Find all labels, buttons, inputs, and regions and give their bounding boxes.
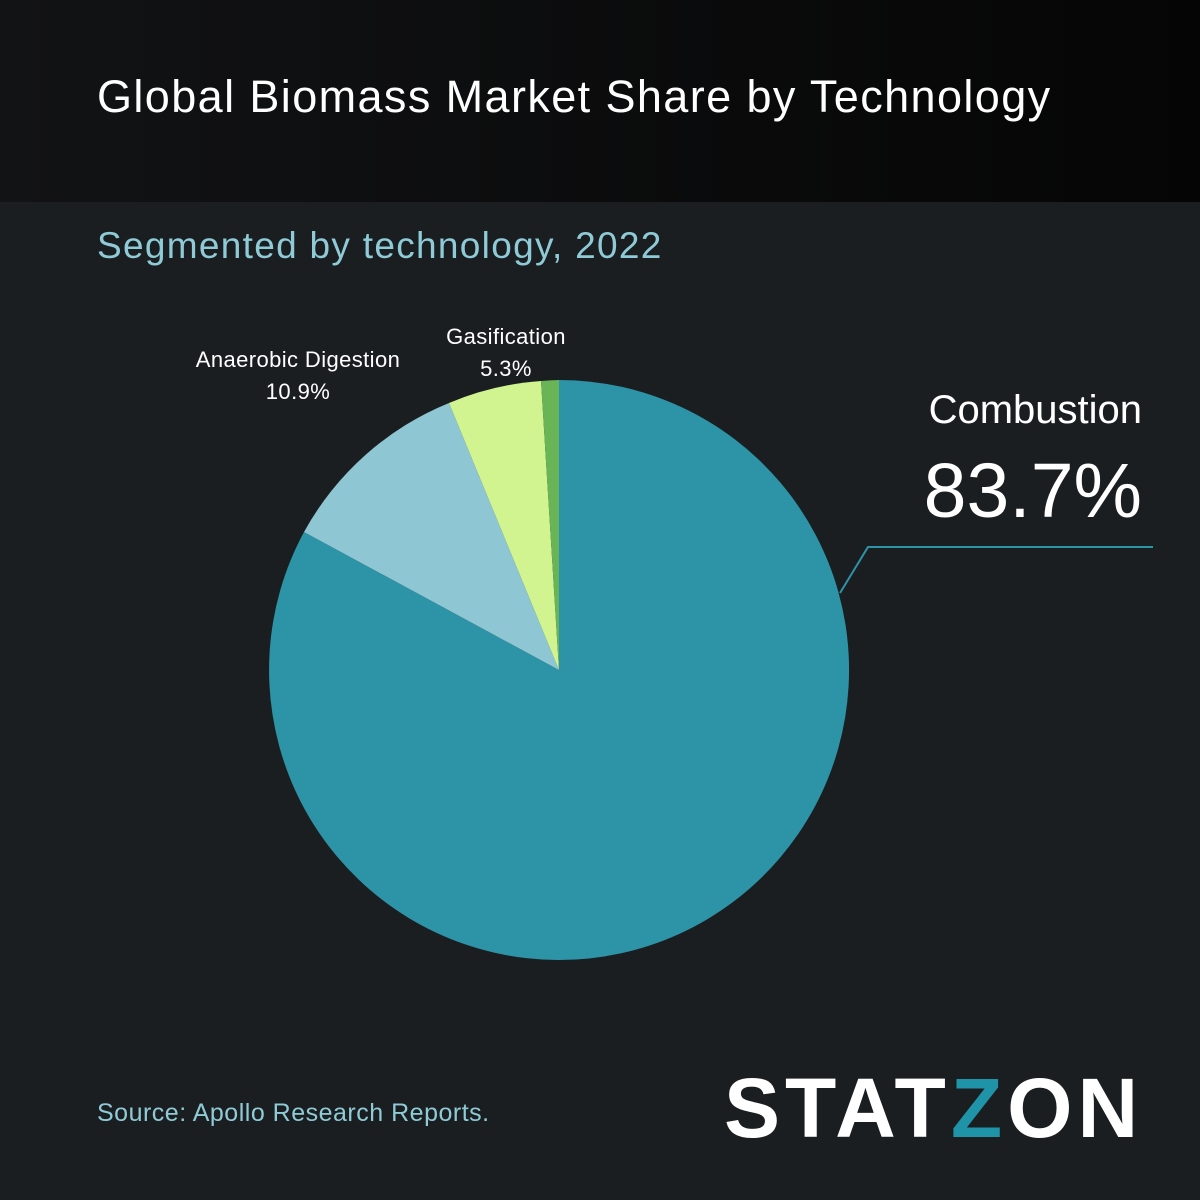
label: anaerobic digestion: Anaerobic Digestion — [196, 347, 400, 372]
label: anaerobic digestion: 10.9% — [266, 379, 330, 404]
label: combustion: Combustion — [929, 388, 1142, 432]
subtitle: Segmented by technology, 2022 — [97, 225, 663, 266]
source: Source: Apollo Research Reports. — [97, 1099, 490, 1127]
label: gasification: Gasification — [446, 324, 566, 349]
slice: combustion — [269, 380, 849, 960]
slice: anaerobic digestion — [304, 403, 559, 670]
logo: STATZON — [724, 1061, 1143, 1155]
label: gasification: 5.3% — [480, 356, 532, 381]
label: combustion: 83.7% — [924, 448, 1142, 534]
leader line: combustion — [840, 547, 1153, 593]
label: combustion — [924, 388, 1142, 534]
header band — [0, 0, 1200, 202]
slice: gasification — [449, 381, 559, 670]
title: Global Biomass Market Share by Technology — [97, 71, 1052, 122]
label: gasification — [446, 324, 566, 381]
slice: other — [541, 380, 559, 670]
label: anaerobic digestion — [196, 347, 400, 404]
